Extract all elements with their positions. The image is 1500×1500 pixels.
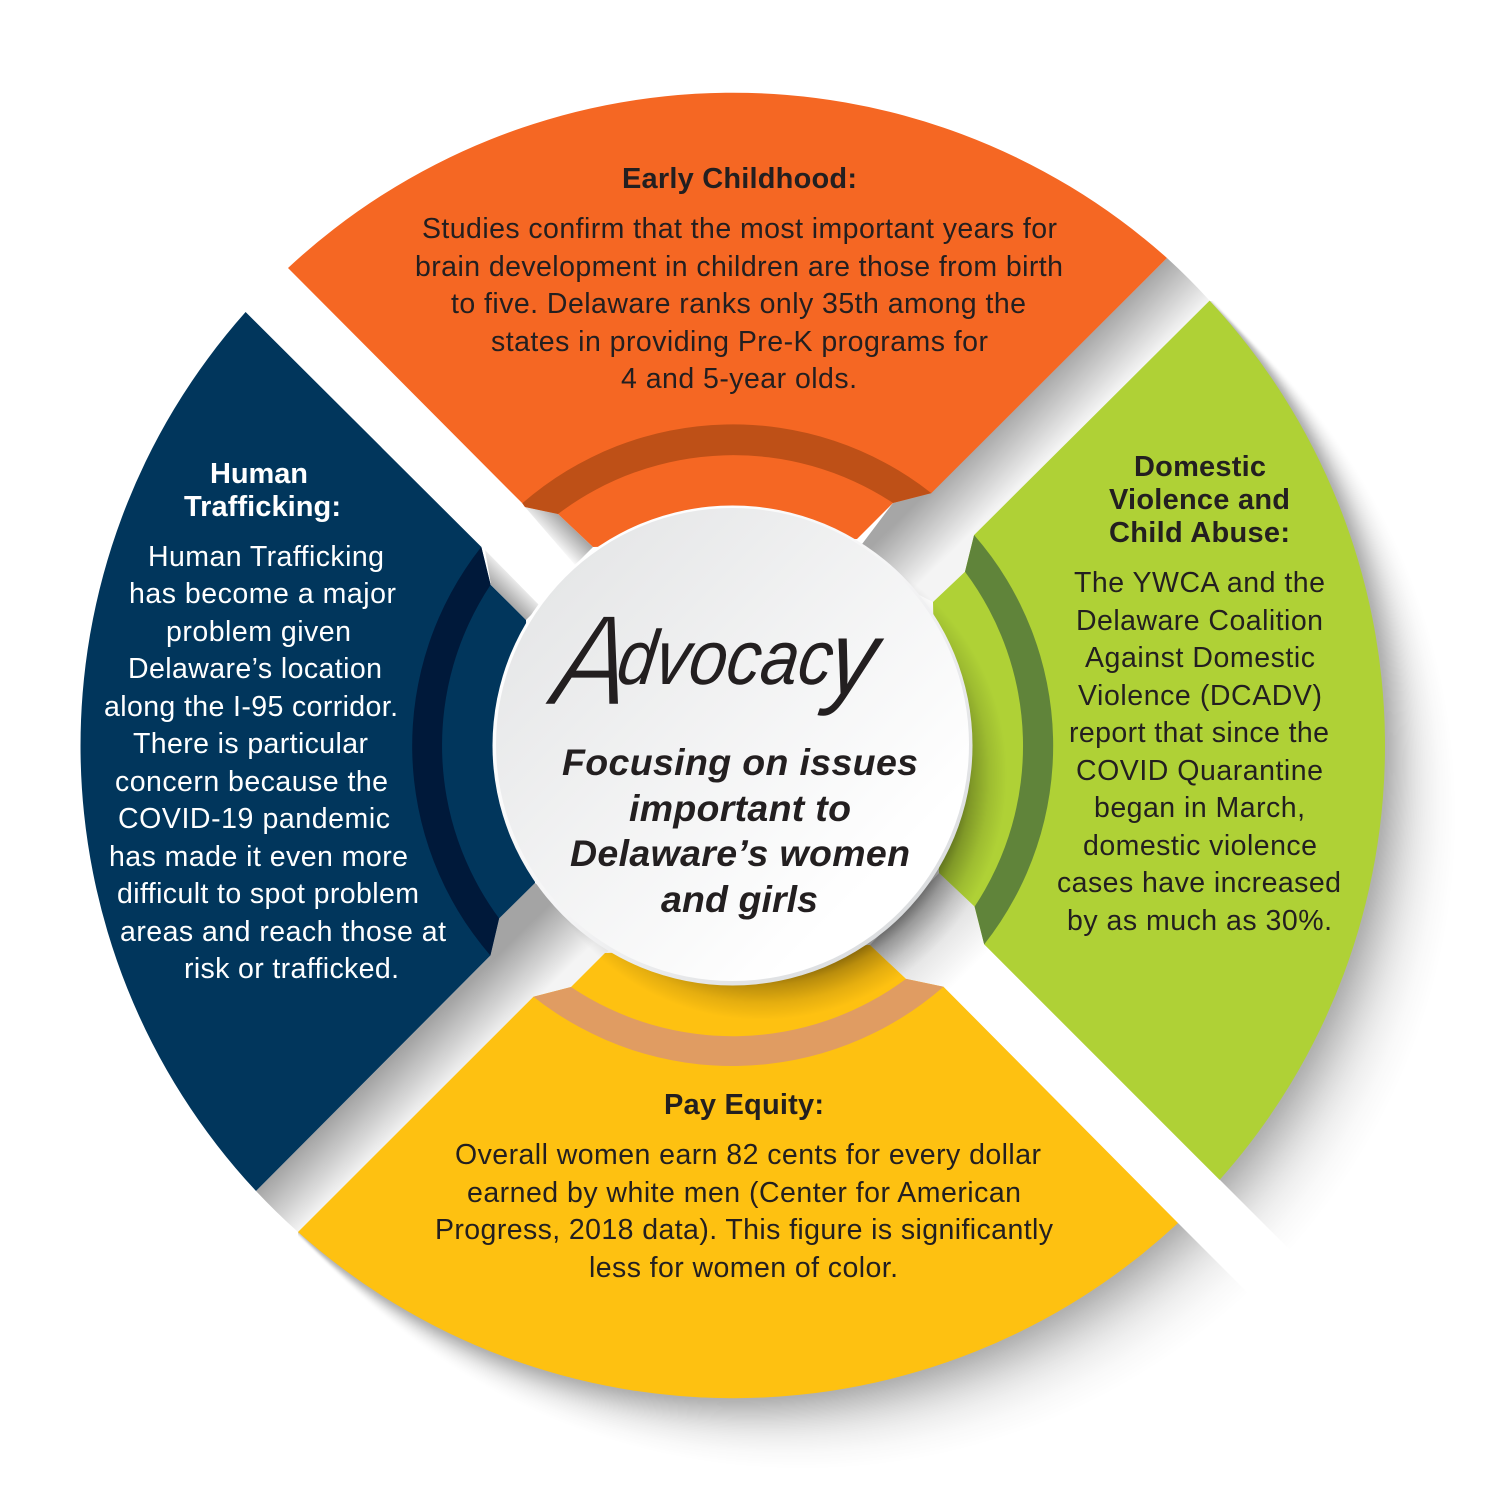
text: early childhood body: Studies confirm that the most important years for [422,213,1058,245]
subtitle: and girls [661,878,818,920]
notch shadow: blue [485,550,540,620]
yellow arc band [533,979,944,1066]
text: domestic violence body: Violence (DCADV) [1078,680,1322,712]
panel: domestic violence [933,301,1385,1180]
circle face [496,508,969,981]
heading: early childhood: Early Childhood: [622,163,857,195]
text: human trafficking body: Human Trafficking [148,541,384,573]
text: domestic violence body [1057,567,1341,937]
heading: domestic violence: Child Abuse: [1109,517,1290,549]
blue arc band [412,547,499,956]
text: early childhood body: brain development in children are those from birth [415,251,1063,283]
text: human trafficking body: difficult to spot problem [117,878,419,910]
text: human trafficking body [104,541,446,985]
text: early childhood body: states in providing Pre-K programs for [491,326,988,358]
text: human trafficking body: concern because the [115,766,388,798]
text: human trafficking body: There is particular [133,728,368,760]
heading: pay equity: Pay Equity: [664,1089,824,1121]
text: pay equity body: Progress, 2018 data). This figure is significantly [435,1214,1054,1246]
text: human trafficking body: areas and reach those at [120,916,446,948]
orange wedge [288,93,1167,547]
gap shadow: yellow to green [870,873,1005,1006]
yellow wedge [298,945,1178,1398]
gap shadow: blue to yellow [256,883,620,1232]
blue wedge [81,312,535,1191]
text: domestic violence body: by as much as 30%. [1067,905,1332,937]
text: pay equity body: Overall women earn 82 cents for every dollar [455,1139,1042,1171]
text: domestic violence body: Delaware Coalition [1076,605,1323,637]
green arc band [965,535,1053,944]
text: human trafficking body: has made it even more [109,841,408,873]
text: human trafficking body: Delaware’s location [128,653,382,685]
text: human trafficking body: COVID-19 pandemic [118,803,390,835]
text: early childhood body: to five. Delaware ranks only 35th among the [451,288,1026,320]
text: human trafficking body: problem given [166,616,351,648]
notch shadow: orange [525,507,593,565]
subtitle: important to [629,787,851,829]
text: domestic violence body: report that since the [1069,717,1329,749]
orange arc band [522,424,931,514]
panel: early childhood [288,93,1167,547]
title: advocacy: dvocac [613,615,839,701]
subtitle: Focusing on issues [562,741,918,783]
text: domestic violence body: COVID Quarantine [1076,755,1323,787]
text: pay equity body: less for women of color. [589,1252,898,1284]
text: domestic violence body: The YWCA and the [1074,567,1325,599]
text: pay equity body [435,1139,1054,1284]
title: advocacy: A [538,589,642,734]
center circle shadow [517,530,1007,1020]
text: human trafficking body: along the I-95 corridor. [104,691,398,723]
text: domestic violence body: Against Domestic [1085,642,1315,674]
circle rim [492,506,972,986]
text: domestic violence body: domestic violence [1083,830,1317,862]
text: domestic violence body: cases have increased [1057,867,1341,899]
green wedge [933,301,1385,1180]
center circle [492,506,972,986]
heading: human trafficking: Human [210,458,308,490]
text: early childhood body [415,213,1063,395]
text: human trafficking body: risk or trafficked. [184,953,399,985]
outer drop shadow [298,301,1436,1449]
heading: domestic violence: Violence and [1109,484,1290,516]
panel: pay equity [298,945,1178,1398]
heading: domestic violence: Domestic [1134,451,1266,483]
title: advocacy: y [817,600,890,717]
panel: human trafficking [81,312,535,1191]
subtitle: Delaware’s women [570,832,910,874]
heading: human trafficking: Trafficking: [184,491,341,523]
gap shadow: orange to green [850,258,1210,602]
heading: human trafficking [184,458,341,523]
text: human trafficking body: has become a major [129,578,396,610]
text: domestic violence body: began in March, [1094,792,1305,824]
heading: domestic violence [1109,451,1290,549]
text: early childhood body: 4 and 5-year olds. [621,363,857,395]
text: pay equity body: earned by white men (Center for American [467,1177,1021,1209]
subtitle [562,741,918,920]
